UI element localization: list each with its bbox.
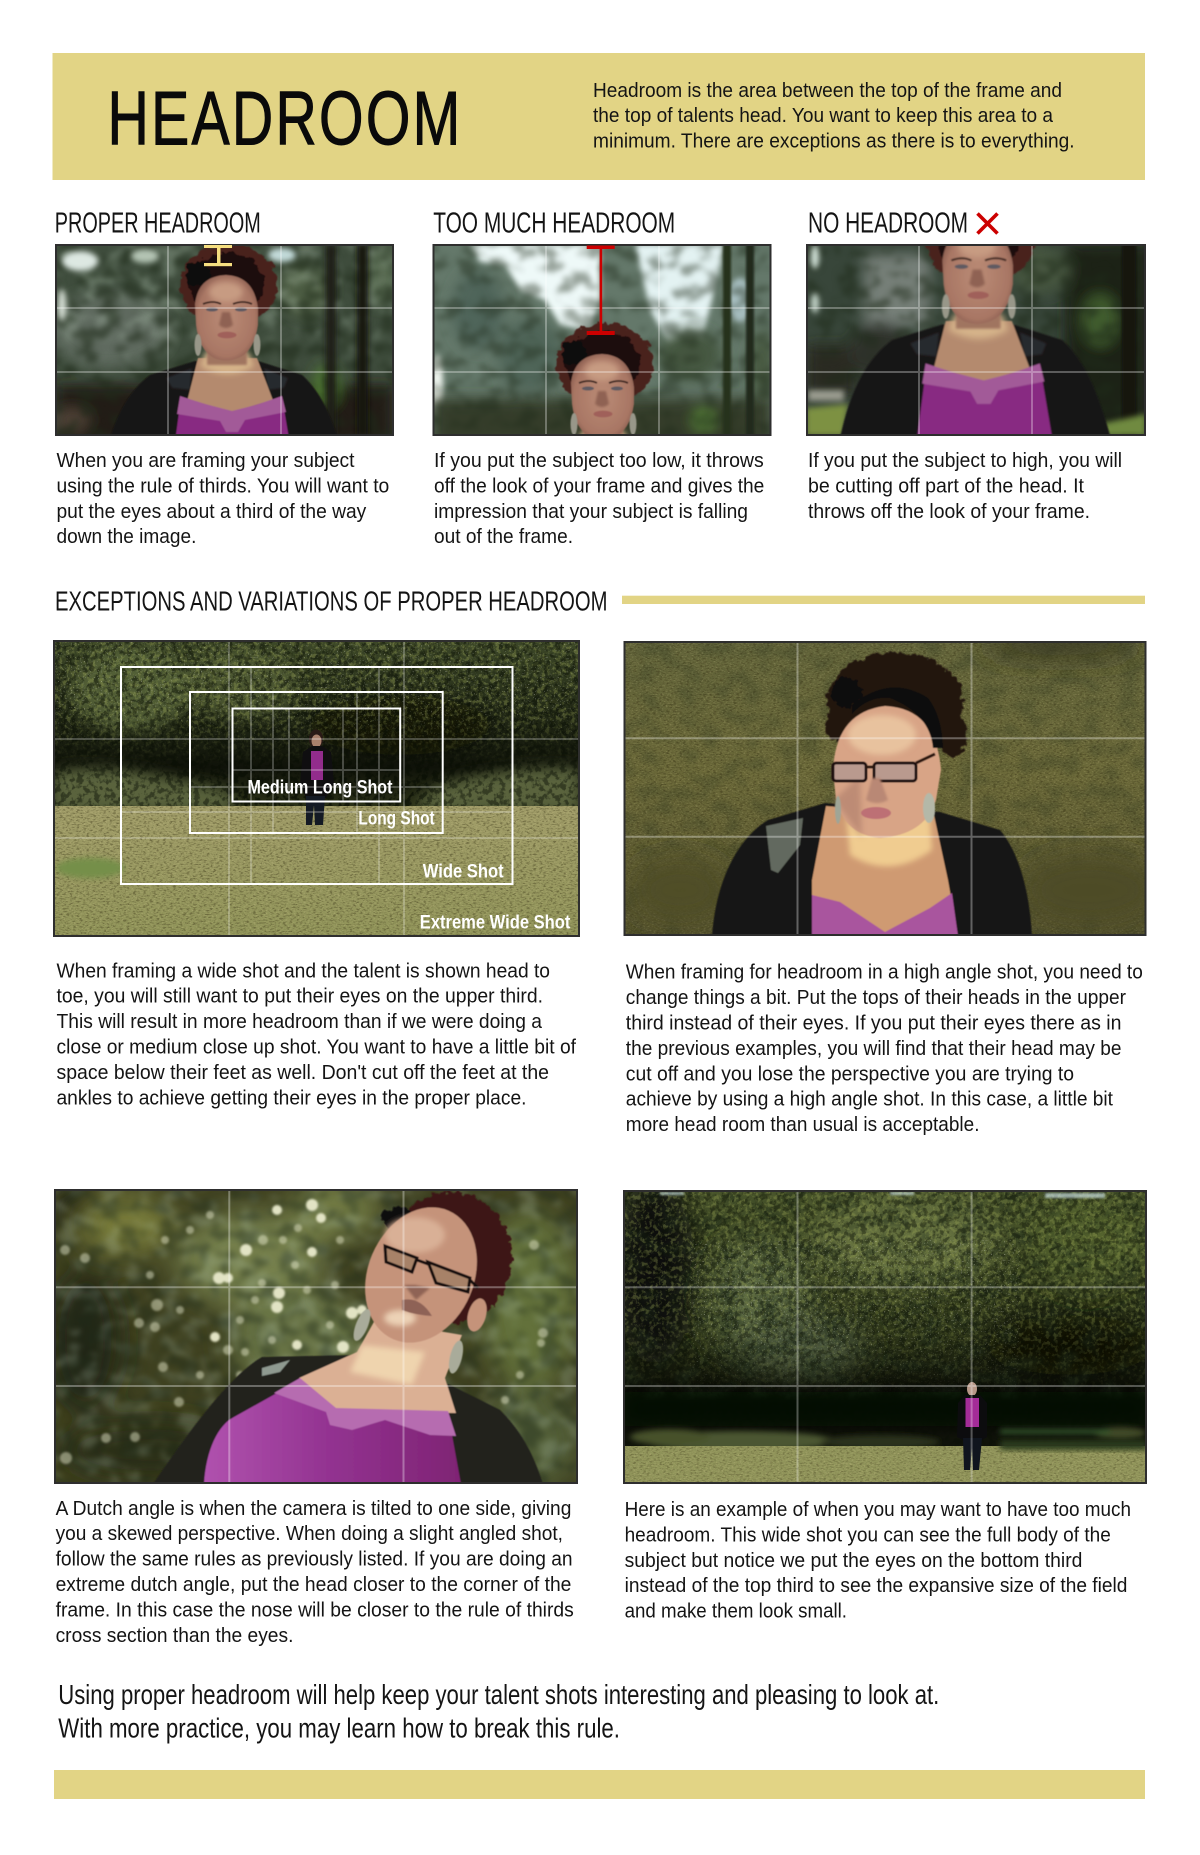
text: expansive field: subject but notice we put the eyes on the bottom third xyxy=(625,1549,1082,1572)
text: expansive field xyxy=(625,1498,1131,1623)
figure: woman looking up xyxy=(712,652,1032,936)
panel: shot sizes example xyxy=(53,640,580,1109)
text: wide shot: space below their feet as well. Don't cut off the feet at the xyxy=(56,1061,549,1084)
heading: no headroom: NO HEADROOM xyxy=(808,207,968,239)
text: high angle: change things a bit. Put the tops of their heads in the upper xyxy=(626,986,1126,1009)
text: dutch angle: follow the same rules as previously listed. If you are doing an xyxy=(56,1548,573,1571)
text: too much headroom: If you put the subject too low, it throws xyxy=(434,449,764,472)
text: wide shot: ankles to achieve getting their eyes in the proper place. xyxy=(56,1086,526,1109)
text: high angle: third instead of their eyes. If you put their eyes there as in xyxy=(626,1012,1122,1034)
bokeh highlights xyxy=(60,1199,548,1464)
text: no headroom xyxy=(808,449,1122,523)
title: HEADROOM xyxy=(108,76,462,161)
figure: standing subject xyxy=(957,1382,987,1470)
text: no headroom: throws off the look of your frame. xyxy=(808,500,1090,523)
panel: no headroom xyxy=(806,193,1150,523)
text: proper headroom: using the rule of thirds. You will want to xyxy=(56,474,389,497)
sky slits xyxy=(660,1192,1105,1198)
photo: too much headroom portrait xyxy=(432,244,772,436)
closing statement: With more practice, you may learn how to break this rule. xyxy=(58,1712,620,1743)
figure: tilted woman xyxy=(153,1190,543,1484)
text: expansive field: instead of the top third to see the expansive size of the field xyxy=(625,1574,1127,1597)
text: proper headroom: down the image. xyxy=(56,525,196,548)
photo: small figure against tree line xyxy=(623,1190,1147,1484)
panel: proper headroom xyxy=(50,207,400,548)
text: too much headroom: off the look of your frame and gives the xyxy=(434,474,764,497)
text: dutch angle xyxy=(56,1497,574,1647)
text: wide shot: This will result in more headroom than if we were doing a xyxy=(56,1010,543,1033)
text: high angle: more head room than usual is acceptable. xyxy=(626,1113,980,1136)
text: too much headroom: impression that your subject is falling xyxy=(434,500,748,523)
text: too much headroom: out of the frame. xyxy=(434,525,573,548)
text: high angle xyxy=(626,961,1143,1136)
icon: red x xyxy=(978,214,998,234)
intro text xyxy=(593,79,1075,153)
heading: proper headroom: PROPER HEADROOM xyxy=(55,207,261,239)
heading: too much headroom: TOO MUCH HEADROOM xyxy=(433,207,675,239)
labels: shot names: Wide Shot xyxy=(423,861,504,882)
text: expansive field: and make them look small. xyxy=(625,1600,847,1623)
text: expansive field: Here is an example of when you may want to have too much xyxy=(625,1498,1131,1521)
panel: dutch angle example xyxy=(48,1180,580,1647)
panel: title banner xyxy=(52,53,1145,180)
text: high angle: When framing for headroom in a high angle shot, you need to xyxy=(626,961,1143,984)
photo: no headroom portrait xyxy=(806,244,1146,436)
closing statement: Using proper headroom will help keep your talent shots interesting and pleasing to look at. xyxy=(58,1679,939,1710)
labels: shot names xyxy=(248,777,571,933)
text: dutch angle: cross section than the eyes. xyxy=(56,1624,293,1647)
text: wide shot xyxy=(56,959,576,1109)
labels: shot names: Long Shot xyxy=(358,808,435,829)
text: dutch angle: extreme dutch angle, put the head closer to the corner of the xyxy=(56,1573,571,1596)
text: high angle: cut off and you lose the perspective you are trying to xyxy=(626,1062,1074,1085)
guide: extreme wide, wide, long and medium long shot frames xyxy=(121,667,512,884)
text: proper headroom xyxy=(56,449,389,548)
labels: shot names: Medium Long Shot xyxy=(248,777,393,798)
text: high angle: the previous examples, you will find that their head may be xyxy=(626,1037,1122,1060)
panel: high angle example xyxy=(623,633,1160,1136)
section heading: exceptions and variations: EXCEPTIONS AND VARIATIONS OF PROPER HEADROOM xyxy=(55,586,608,617)
text: wide shot: toe, you will still want to put their eyes on the upper third. xyxy=(56,985,543,1008)
text: no headroom: If you put the subject to high, you will xyxy=(808,449,1122,472)
section heading: exceptions and variations xyxy=(55,586,1145,617)
marker: excess headroom xyxy=(587,246,615,335)
intro text: minimum. There are exceptions as there is to everything. xyxy=(593,130,1075,153)
text: high angle: achieve by using a high angle shot. In this case, a little bit xyxy=(626,1088,1113,1111)
photo: proper headroom portrait xyxy=(55,244,394,436)
text: expansive field: headroom. This wide shot you can see the full body of the xyxy=(625,1523,1111,1546)
closing statement xyxy=(58,1679,939,1743)
text: too much headroom xyxy=(434,449,764,548)
panel: too much headroom by choice example xyxy=(615,1175,1155,1623)
text: dutch angle: you a skewed perspective. When doing a slight angled shot, xyxy=(56,1522,563,1545)
photo: dutch angle portrait xyxy=(54,1189,578,1484)
photo: high angle portrait xyxy=(624,641,1146,936)
intro text: Headroom is the area between the top of the frame and xyxy=(593,79,1062,102)
text: wide shot: close or medium close up shot. You want to have a little bit of xyxy=(56,1036,576,1058)
footer bar xyxy=(54,1770,1145,1799)
text: proper headroom: When you are framing your subject xyxy=(56,449,355,472)
marker: small headroom xyxy=(204,245,232,266)
figure: standing subject xyxy=(300,730,334,825)
text: proper headroom: put the eyes about a third of the way xyxy=(56,500,367,523)
text: wide shot: When framing a wide shot and the talent is shown head to xyxy=(56,959,550,982)
intro text: the top of talents head. You want to keep this area to a xyxy=(593,104,1054,127)
text: dutch angle: A Dutch angle is when the camera is tilted to one side, giving xyxy=(56,1497,571,1520)
photo: wide shot framing guides xyxy=(53,640,580,937)
text: no headroom: be cutting off part of the head. It xyxy=(808,474,1084,497)
panel: too much headroom xyxy=(431,207,774,559)
text: dutch angle: frame. In this case the nose will be closer to the rule of thirds xyxy=(56,1598,574,1621)
